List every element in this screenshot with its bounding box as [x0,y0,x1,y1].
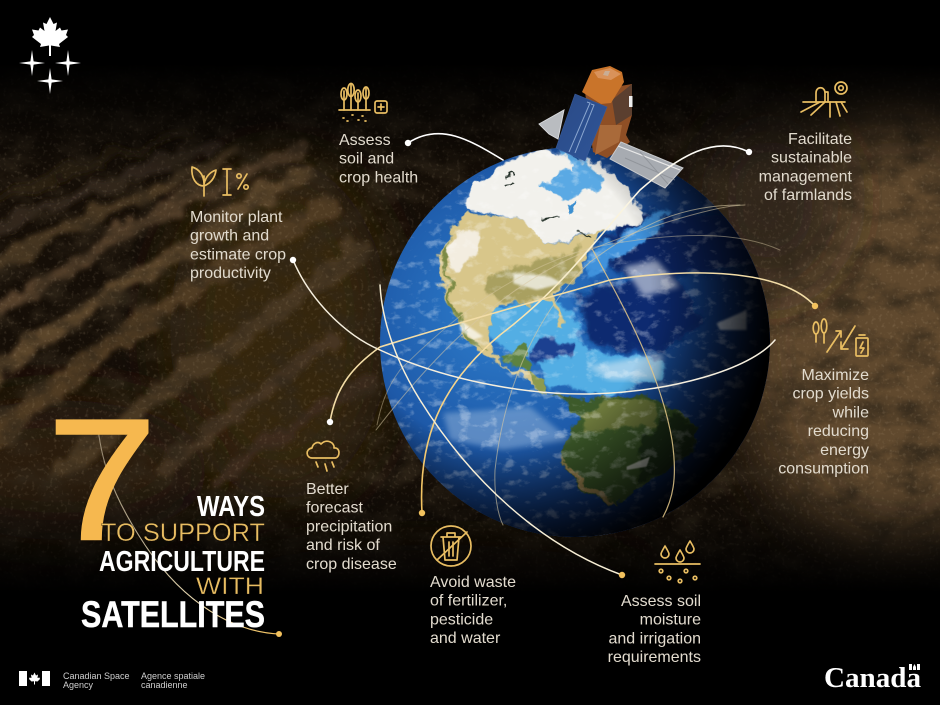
block: assess soil moisture: moisture [640,612,701,629]
line: title [98,428,279,634]
block: sustainable management: sustainable [771,150,852,167]
block: forecast precipitation: forecast [306,500,363,517]
title: TO SUPPORT [101,519,265,547]
block: avoid waste: of fertilizer, [430,593,507,610]
block: avoid waste: and water [430,630,501,647]
icon: canadian flag [19,671,50,686]
block: avoid waste: Avoid waste [430,574,516,591]
block: monitor plant growth [190,167,286,282]
block: assess soil moisture: Assess soil [621,593,701,610]
block: avoid waste: pesticide [430,611,493,628]
block: sustainable management [759,82,853,204]
block: assess soil and crop health: Assess [339,132,391,149]
footer: csa signature: canadienne [141,680,188,690]
icon: water drops and soil [655,541,700,583]
block: assess soil and crop health [339,84,418,186]
connector lines [98,134,818,637]
line: soil and crop health [408,134,503,160]
right solar wing [610,142,683,188]
icon: crops with plus [339,84,387,121]
block: maximize crop yields: energy [820,442,869,459]
block: monitor plant growth: productivity [190,265,271,282]
block: maximize crop yields: Maximize [801,367,869,384]
block: sustainable management: Facilitate [788,131,852,148]
icon: rain cloud [307,441,339,471]
north america [437,213,610,390]
blue panel [556,94,607,161]
block: maximize crop yields: consumption [778,460,869,478]
block: monitor plant growth: growth and [190,228,269,245]
title: SATELLITES [81,594,265,635]
line: precipitation to yields [330,273,815,422]
icon: crossed out bin [431,526,471,566]
block: assess soil moisture: requirements [608,649,701,666]
orange top [582,66,624,104]
block: maximize crop yields: while [832,404,869,421]
block: maximize crop yields: crop yields [793,386,869,403]
logo: maple leaf and stars [19,17,81,94]
canada wordmark: Canada [824,662,921,694]
line: monitor plant growth [293,260,775,394]
title [47,384,265,635]
block: maximize crop yields: reducing [808,423,869,440]
block: forecast precipitation: crop disease [306,556,397,573]
block: sustainable management: management [759,168,853,185]
icon: crops, arrows and battery [813,319,868,356]
block: assess soil and crop health: soil and [339,151,394,168]
snow [467,150,643,247]
block: sustainable management: of farmlands [764,187,852,204]
line: soil moisture [380,285,622,575]
footer: csa signature: Agency [63,680,94,690]
satellite [539,66,683,188]
left solar wing [539,110,564,139]
block: assess soil moisture: and irrigation [608,630,701,647]
icon: farm with gear [801,82,847,117]
block: forecast precipitation: and risk of [306,537,380,554]
block: assess soil moisture [608,541,701,666]
bus [585,84,632,158]
title: WITH [196,573,264,600]
footer: csa signature: Agence spatiale [141,671,205,681]
footer: csa signature [19,671,205,690]
block: monitor plant growth: Monitor plant [190,209,283,226]
block: avoid waste [430,526,516,647]
orbit arcs [376,205,780,525]
block: forecast precipitation [306,441,397,573]
block: monitor plant growth: estimate crop [190,246,286,263]
footer: csa signature: Canadian Space [63,671,130,681]
title: WAYS [197,491,265,523]
line: farmlands to fertilizer [422,146,749,513]
shallow seas [487,300,663,397]
big seven: 7 [47,384,157,576]
bright cloud bands [587,353,663,380]
title: AGRICULTURE [99,546,265,578]
block: forecast precipitation: precipitation [306,518,392,535]
block: forecast precipitation: Better [306,481,349,498]
icon: seedling and percent [192,167,248,196]
block: assess soil and crop health: crop health [339,169,418,186]
furrows [0,133,370,480]
globe [380,147,770,537]
block: maximize crop yields [778,319,869,478]
south america [550,393,700,507]
